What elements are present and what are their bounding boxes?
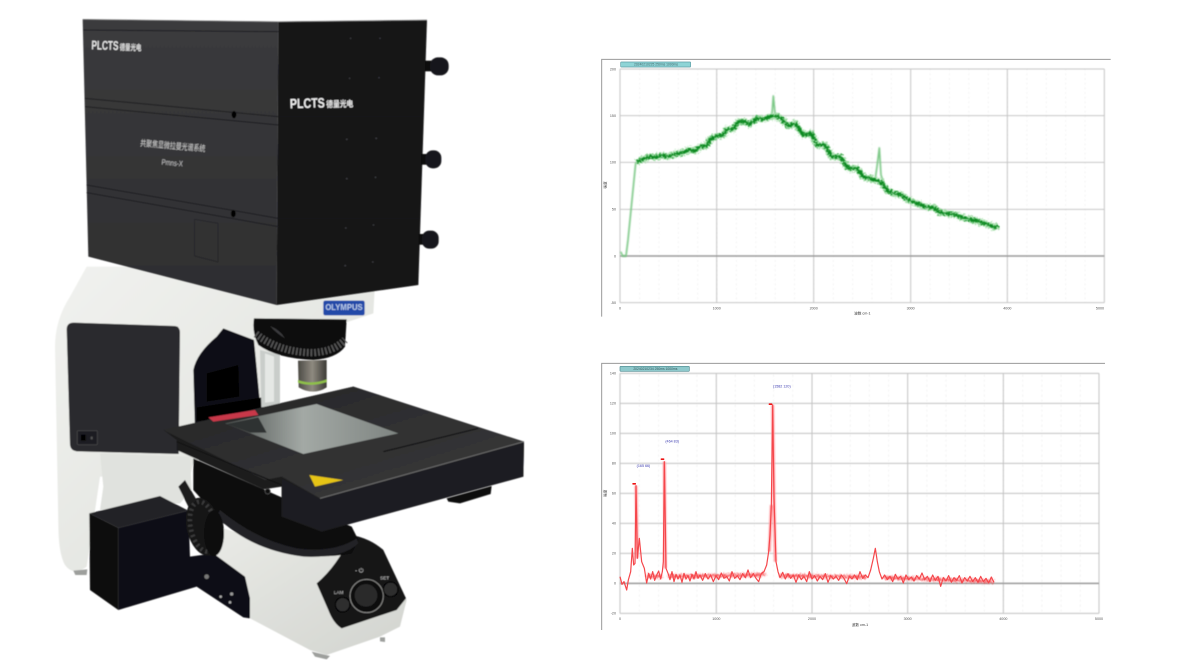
column	[260, 350, 280, 407]
y axis labels: 60	[612, 492, 616, 496]
green spectrum chart	[602, 59, 1111, 317]
arm opening	[193, 328, 263, 430]
OLYMPUS badge: OLYMPUS	[325, 302, 363, 312]
OLYMPUS badge	[323, 301, 365, 315]
y axis labels: 80	[612, 462, 616, 466]
x axis labels: 3000	[904, 617, 912, 621]
x axis labels: 2000	[810, 306, 818, 310]
small hatch	[195, 219, 218, 262]
legend pill: 20240210225 250ms 1000ms	[634, 63, 678, 67]
x axis labels	[619, 617, 1103, 621]
y axis labels: 50	[612, 208, 616, 212]
buttons	[335, 597, 350, 612]
stage seam	[177, 428, 478, 485]
stage top surface	[163, 387, 523, 498]
product name: 共聚焦显微拉曼光谱系统	[140, 137, 206, 154]
power switch	[77, 431, 97, 445]
body inner shadow	[100, 453, 192, 510]
legend pill	[621, 62, 691, 67]
y axis labels: 200	[610, 67, 616, 71]
red peak halo	[636, 405, 775, 568]
grid	[620, 69, 1104, 303]
chart frame	[602, 363, 1105, 630]
dark side panel	[67, 323, 180, 454]
y axis labels: 140	[610, 372, 616, 376]
side knobs	[419, 57, 449, 249]
peak labels	[637, 384, 791, 468]
lower focus base	[213, 528, 407, 655]
base feet	[73, 569, 385, 659]
x axis labels: 4000	[1003, 306, 1011, 310]
x axis labels: 2000	[808, 617, 816, 621]
objective turret	[253, 318, 347, 360]
housing top edge	[83, 19, 427, 22]
stage carrier	[193, 458, 358, 556]
white microscope body	[55, 267, 375, 571]
spectrometer housing	[83, 19, 449, 305]
legend pill	[620, 366, 689, 371]
y axis labels	[610, 372, 616, 616]
x axis title: 波数 cm-1	[854, 311, 871, 316]
y axis labels: 40	[612, 522, 616, 526]
peak labels: (165 66)	[637, 464, 650, 468]
side logo: PLCTS德量光电	[290, 95, 354, 111]
red warning label	[208, 410, 258, 422]
housing front face	[83, 19, 278, 305]
stage edge highlight	[320, 442, 524, 498]
yellow laser warning triangle	[309, 475, 343, 487]
housing side face	[277, 20, 427, 305]
red spectrum trace	[620, 405, 994, 590]
objective lens	[298, 360, 327, 392]
chart frame	[602, 59, 1111, 317]
focus knob	[178, 480, 226, 559]
x axis labels: 1000	[712, 617, 720, 621]
y axis title: 强度	[603, 489, 608, 497]
front logo: PLCTS德量光电	[91, 38, 142, 54]
x axis labels: 5000	[1096, 306, 1104, 310]
grid	[620, 373, 1099, 613]
x axis title: 波数 cm-1	[852, 622, 868, 627]
y axis labels: -50	[611, 301, 616, 305]
control knob	[350, 579, 383, 613]
y axis labels: 0	[614, 254, 616, 258]
y axis labels: 0	[614, 582, 616, 586]
access holes	[232, 111, 236, 118]
x axis labels: 3000	[907, 306, 915, 310]
y axis labels: 100	[610, 432, 616, 436]
microscope lower assembly	[55, 267, 524, 659]
y axis title: 强度	[603, 181, 608, 189]
stage rear ledge	[197, 397, 269, 421]
stage screw	[265, 489, 270, 494]
peak markers	[632, 403, 772, 485]
panel labels: LAM	[334, 590, 344, 595]
sample stage	[163, 387, 524, 532]
microscope system photo	[55, 19, 524, 659]
stage foot	[447, 486, 492, 503]
product model: Pmns-X	[161, 158, 184, 169]
green rise and peak segments	[621, 96, 884, 256]
x axis labels: 0	[619, 306, 621, 310]
peak labels: (464 83)	[665, 440, 679, 444]
control panel	[317, 535, 406, 628]
y axis labels: 100	[610, 161, 616, 165]
x axis labels: 0	[619, 617, 621, 621]
stage side	[163, 387, 524, 532]
stage front face	[282, 442, 524, 532]
camera block	[89, 496, 250, 618]
housing seams	[83, 30, 278, 227]
green spectrum trace	[637, 116, 998, 227]
glass window	[225, 404, 398, 454]
red spectrum chart	[602, 363, 1105, 630]
x axis labels	[619, 306, 1104, 310]
green spectrum halo	[637, 116, 998, 227]
peak labels: (1582 120)	[773, 384, 791, 388]
screws	[344, 38, 381, 266]
y axis labels: -20	[611, 612, 616, 616]
red spectrum noise band	[647, 573, 993, 582]
legend pill: 20240210234 250ms 1000ms	[633, 367, 678, 371]
control panel: SET	[380, 575, 389, 580]
x axis labels: 5000	[1095, 617, 1103, 621]
control panel: - ⏻	[355, 568, 364, 575]
y axis labels: 20	[612, 552, 616, 556]
y axis labels: 150	[610, 114, 616, 118]
y axis labels	[610, 67, 616, 305]
x axis labels: 1000	[713, 306, 721, 310]
y axis labels: 120	[610, 402, 616, 406]
x axis labels: 4000	[999, 617, 1007, 621]
